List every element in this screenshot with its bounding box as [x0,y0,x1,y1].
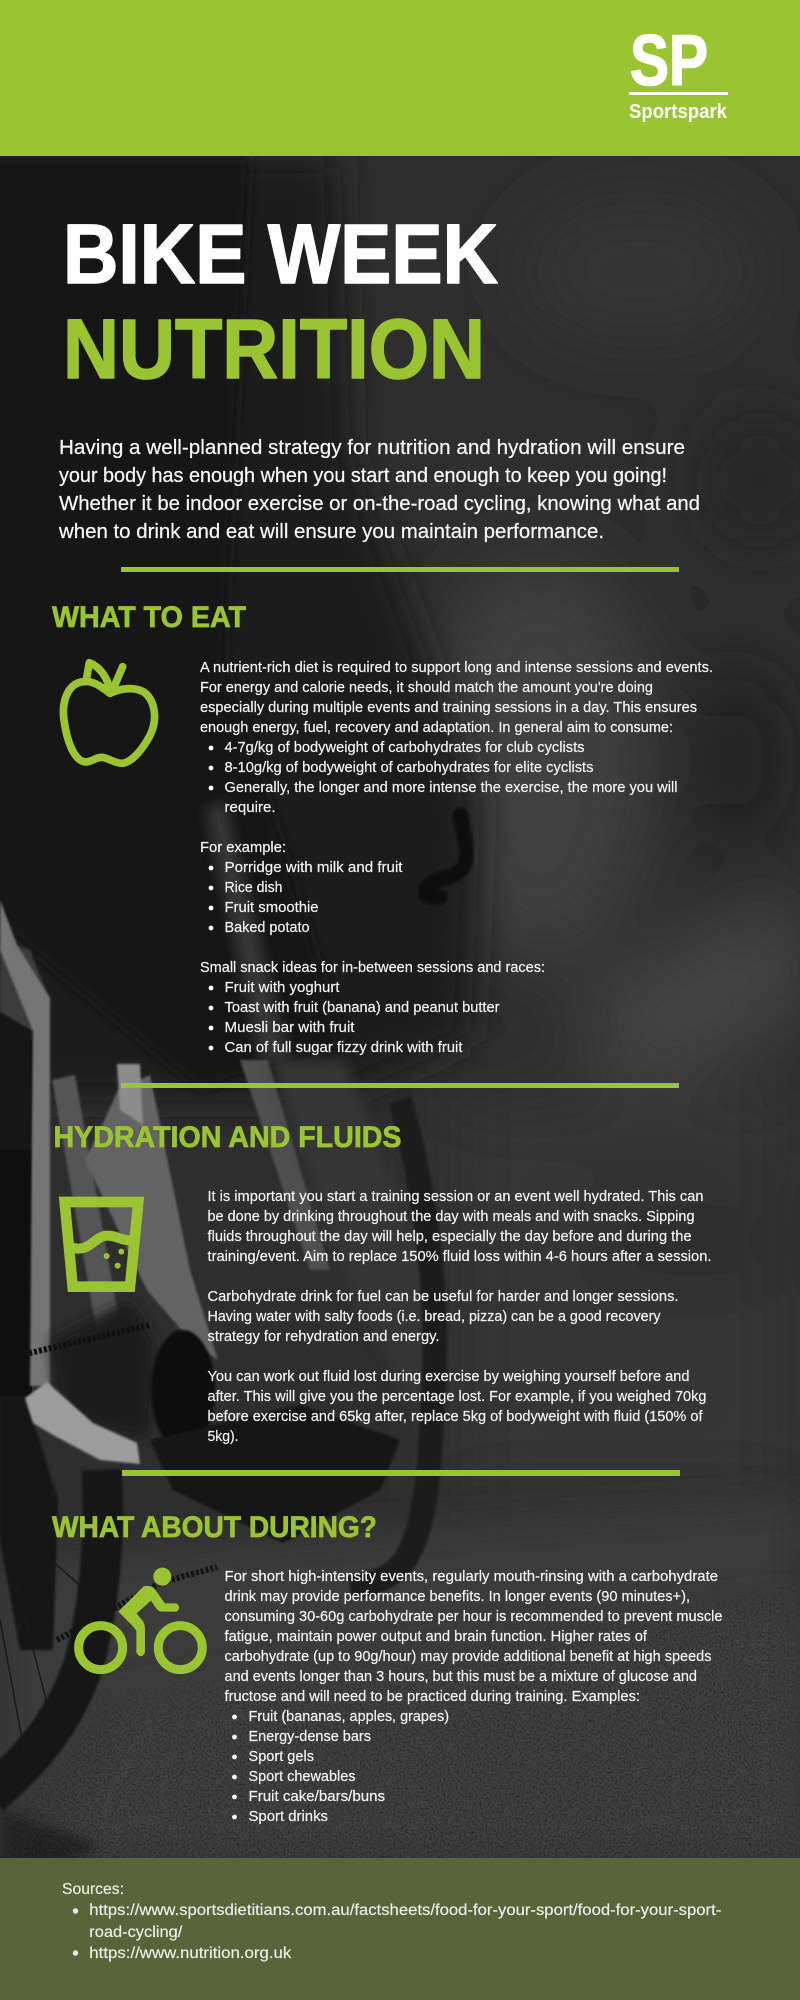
panel: sources footer: https://www.sportsdietitians.com.au/factsheets/food-for-your-sport/food-for-your-sport- [89,1902,721,1919]
road [0,1500,800,1870]
heading: what to eat: WHAT TO EAT [52,601,246,634]
text: during body: Sport gels [248,1748,314,1765]
text: what to eat body: 4-7g/kg of bodyweight of carbohydrates for club cyclists [224,739,584,756]
text: what to eat body: For energy and calorie needs, it should match the amount you're doing [200,679,653,696]
intro paragraph [58,436,700,543]
intro paragraph: Having a well-planned strategy for nutrition and hydration will ensure [59,436,685,459]
text: during body: For short high-intensity events, regularly mouth-rinsing with a carbohydrate [224,1568,718,1585]
text: hydration body: 5kg). [208,1428,238,1445]
header band [0,0,800,156]
text: hydration body [208,1188,712,1445]
text: what to eat body: Fruit smoothie [224,899,318,916]
text: what to eat body: Generally, the longer and more intense the exercise, the more you will [224,779,678,796]
text: hydration body: Carbohydrate drink for fuel can be useful for harder and longer sessions. [208,1288,678,1305]
text: hydration body: before exercise and 65kg after, replace 5kg of bodyweight with fluid (150% of [208,1408,703,1425]
text: what to eat body: Can of full sugar fizzy drink with fruit [224,1039,463,1056]
panel: sources footer: Sources: [62,1881,124,1898]
text: what to eat body: Fruit with yoghurt [224,979,340,996]
text: what to eat body: A nutrient-rich diet is required to support long and intense sessions and events. [200,659,713,676]
text: what to eat body: 8-10g/kg of bodyweight of carbohydrates for elite cyclists [224,759,594,776]
title: BIKE WEEK [63,207,498,301]
text: what to eat body: enough energy, fuel, recovery and adaptation. In general aim to consume: [200,719,673,736]
icon: cyclist [79,1568,202,1670]
panel: what to eat [52,601,713,1056]
panel: sources footer [0,1858,800,2000]
text: hydration body: fluids throughout the day will help, especially the day before and during the [208,1228,692,1245]
text: during body: Fruit cake/bars/buns [248,1788,385,1805]
text: during body: fructose and will need to be practiced during training. Examples: [224,1688,640,1705]
text: what to eat body: Rice dish [224,879,282,896]
title: NUTRITION [63,302,485,396]
panel: hydration and fluids [54,1121,712,1445]
text: what to eat body: For example: [200,839,286,856]
text: hydration body: You can work out fluid lost during exercise by weighing yourself before and [208,1368,690,1385]
title [63,207,498,396]
logo: Sportspark: Sportspark [629,101,728,123]
text: during body [224,1568,722,1825]
text: what to eat body: require. [224,799,276,816]
text: hydration body: It is important you start a training session or an event well hydrated. This can [208,1188,704,1205]
text: what to eat body: Muesli bar with fruit [224,1019,355,1036]
text: what to eat body: Baked potato [224,919,310,936]
intro paragraph: Whether it be indoor exercise or on-the-road cycling, knowing what and [59,492,700,515]
text: during body: Sport chewables [248,1768,356,1785]
text: what to eat body: Toast with fruit (banana) and peanut butter [224,999,500,1016]
panel: what about during [52,1511,722,1825]
text: during body: Fruit (bananas, apples, grapes) [248,1708,449,1725]
text: during body: carbohydrate (up to 90g/hour) may provide additional benefit at high speeds [224,1648,712,1665]
text: hydration body: after. This will give you the percentage lost. For example, if you weighed 70kg [208,1388,706,1405]
text: during body: and events longer than 3 hours, but this must be a mixture of glucose and [224,1668,697,1685]
text: what to eat body [200,659,713,1056]
rear wheel tyre [0,1470,103,1795]
logo: Sportspark: SP [630,22,708,101]
text: what to eat body: Small snack ideas for in-between sessions and races: [200,959,545,976]
panel: sources footer: https://www.nutrition.org.uk [89,1945,292,1962]
panel: sources footer: road-cycling/ [89,1924,183,1941]
handlebar drop [426,815,466,897]
text: hydration body: be done by drinking throughout the day with meals and with snacks. Sipping [208,1208,694,1225]
text: hydration body: strategy for rehydration and energy. [208,1328,440,1345]
text: during body: fatigue, maintain power output and brain function. Higher rates of [224,1628,648,1645]
text: during body: drink may provide performance benefits. In longer events (90 minutes+), [224,1588,690,1605]
chain and spokes [0,1550,217,1755]
text: during body: consuming 30-60g carbohydrate per hour is recommended to prevent muscle [224,1608,722,1625]
heading: what about during: WHAT ABOUT DURING? [52,1511,377,1544]
text: what to eat body: Porridge with milk and fruit [224,859,403,876]
icon: apple [63,663,155,763]
intro paragraph: when to drink and eat will ensure you maintain performance. [58,520,604,543]
text: hydration body: training/event. Aim to replace 150% fluid loss within 4-6 hours after a session. [208,1248,712,1265]
text: what to eat body: especially during multiple events and training sessions in a day. This ensures [200,699,697,716]
intro paragraph: your body has enough when you start and enough to keep you going! [59,464,667,487]
text: hydration body: Having water with salty foods (i.e. bread, pizza) can be a good recovery [208,1308,661,1325]
lever stripes [205,800,440,1588]
text: during body: Sport drinks [248,1808,328,1825]
heading: hydration and fluids: HYDRATION AND FLUIDS [54,1121,402,1154]
icon: glass of water [65,1202,138,1287]
frame and leg [0,900,400,1650]
text: during body: Energy-dense bars [248,1728,371,1745]
